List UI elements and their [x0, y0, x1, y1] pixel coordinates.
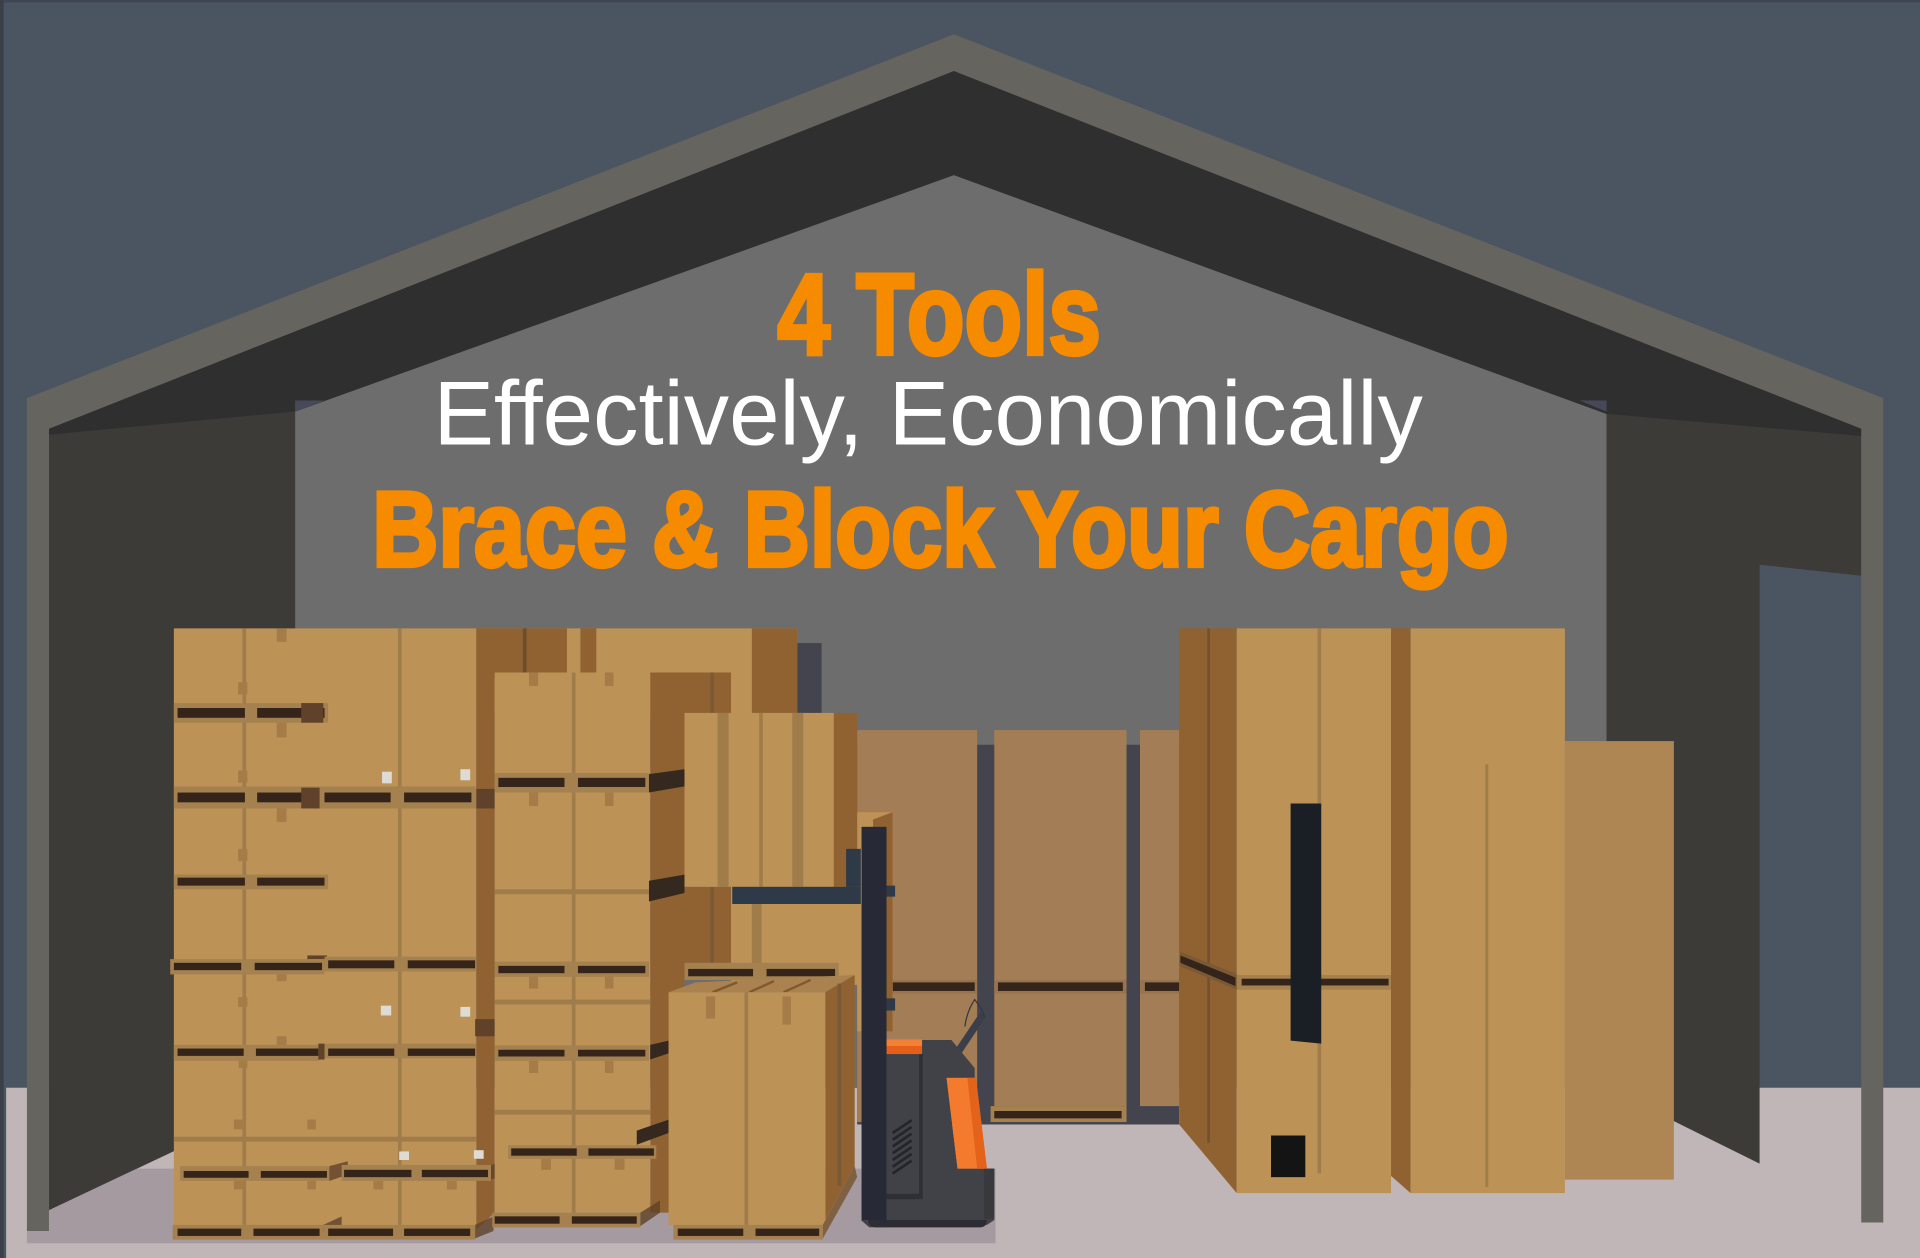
tall box front [1237, 628, 1391, 1193]
box front [669, 992, 825, 1225]
forklift forks [732, 849, 895, 1011]
box behind forklift forks [684, 812, 893, 1031]
forklift bumper [984, 1169, 994, 1219]
title: 4 Tools: 4 Tools [778, 251, 1101, 379]
tall box strap [1180, 952, 1391, 990]
forklift orange side panel [947, 1078, 987, 1169]
forklift body [861, 1040, 994, 1227]
forklift base [868, 1220, 987, 1227]
roof notches [295, 401, 1607, 412]
right side wall [1607, 414, 1861, 1164]
subtitle: Effectively, Economically: Effectively, Economically [433, 364, 1424, 465]
forklift mast [862, 827, 887, 1220]
forklift panel outline [887, 1053, 923, 1199]
box pallet [673, 1166, 857, 1240]
rear right box [1565, 741, 1674, 1180]
middle stack seams [495, 672, 650, 1213]
forklift [861, 827, 994, 1227]
middle stack straps [492, 769, 684, 1227]
pallet strap 3 [174, 875, 328, 889]
box tape [706, 996, 791, 1025]
tall box side [1179, 628, 1237, 1193]
middle stack tape pieces [529, 672, 624, 1170]
title: Brace and Block Your Cargo: Brace & Block Your Cargo [372, 470, 1509, 589]
right tall box [1179, 628, 1391, 1193]
forklift vent [893, 1120, 912, 1173]
floor [6, 1088, 1920, 1258]
packing tape pieces [234, 628, 457, 1189]
main left pallet stack [170, 628, 509, 1240]
floor shadow [27, 1169, 996, 1243]
middle pallet stack [492, 672, 684, 1227]
upper back box stack [476, 628, 797, 721]
stack front face [174, 628, 476, 1234]
roof underside [47, 69, 1864, 436]
front pallet box [669, 975, 857, 1240]
pallet strap 1 [174, 703, 328, 723]
white labels [381, 769, 484, 1160]
tall box black block [1271, 1136, 1305, 1177]
box raised on forklift forks [684, 713, 857, 887]
bottom pallets [173, 1216, 493, 1240]
tall box dark brace [1291, 804, 1321, 1044]
pallet strap 5 [174, 1019, 495, 1061]
box side [825, 975, 855, 1220]
back wall [295, 175, 1607, 1088]
forklift tiller handle [957, 1000, 984, 1053]
pallet strap 6 [180, 1160, 509, 1181]
back doorway dark area [797, 643, 1179, 1124]
second tall box [1391, 628, 1565, 1193]
back row boxes [857, 730, 1179, 1122]
stack side face [476, 628, 495, 1230]
forklift orange cap [887, 1039, 922, 1054]
stack seams [174, 628, 476, 1225]
box top [669, 975, 855, 992]
pallet strap 2 [174, 786, 495, 808]
left side wall [49, 412, 295, 1210]
pallet strap 4 [170, 955, 476, 974]
middle stack front and side faces [495, 672, 684, 1213]
